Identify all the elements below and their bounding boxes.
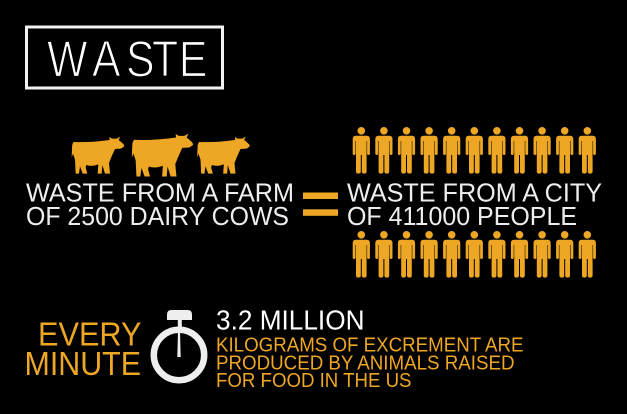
statistic: 3.2 million: 3.2 MILLION [216,304,364,335]
text block: excrement description: PRODUCED BY ANIMALS RAISED [216,352,514,374]
text block: farm waste: OF 2500 DAIRY COWS [26,201,289,231]
text block: every minute: EVERY [38,315,142,352]
text block: excrement description [216,335,524,392]
icon: equals sign [303,192,338,216]
icon: cow 3 [197,137,250,174]
text block: every minute [24,315,142,382]
icon: cow 2 [132,134,193,177]
text block: farm waste [26,178,294,231]
icon group: three cows [72,134,250,177]
text block: farm waste: WASTE FROM A FARM [26,178,294,208]
text block: city waste: WASTE FROM A CITY [347,178,602,208]
text block: excrement description: KILOGRAMS OF EXCREMENT ARE [216,335,524,357]
text block: city waste: OF 411000 PEOPLE [347,201,577,231]
text block: excrement description: FOR FOOD IN THE US [216,370,412,392]
icon: cow 1 [72,137,124,174]
icon row: people top [353,127,596,174]
icon row: people bottom [353,231,596,278]
title: WASTE: WASTE [47,30,207,88]
text block: every minute: MINUTE [24,345,141,382]
text block: city waste [347,178,602,231]
icon: stopwatch [154,310,204,380]
